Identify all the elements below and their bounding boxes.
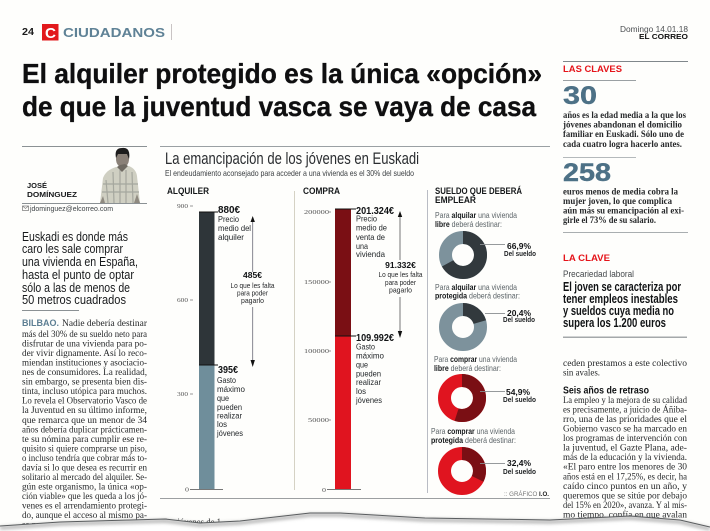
- label: 485 euros: [230, 270, 275, 305]
- kicker: Precariedad laboral: [563, 269, 634, 279]
- heading: sueldo: SUELDO QUE DEBERÁ: [435, 186, 522, 196]
- subheading: Seis años de retraso: [563, 386, 649, 396]
- heading: sueldo: EMPLEAR: [435, 195, 476, 205]
- label: 109.992 euros: [355, 333, 394, 405]
- panel: infographic: [160, 146, 550, 499]
- label: 395 euros: máximo: [217, 384, 245, 394]
- article text: BILBAO.: [22, 318, 59, 328]
- intro text: 50 metros cuadrados: [22, 292, 126, 307]
- donut 2: alquilar protegida: Para alquilar una vivienda: [435, 282, 517, 292]
- text: 258: mujer joven, lo que complica: [563, 196, 672, 206]
- article text: solitario al mercado del alquiler. Se-: [22, 473, 147, 483]
- date: Domingo 14.01.18: [620, 25, 689, 34]
- label: 880 euros: Precio: [218, 214, 239, 224]
- label: 201.324 euros: venta de: [356, 232, 385, 242]
- author photo: [100, 148, 140, 203]
- label: 485 euros: para poder: [237, 288, 268, 298]
- label: 485 euros: 485€: [243, 270, 262, 280]
- article text: tinta, incluso utópica para muchos.: [22, 387, 147, 397]
- label: 91.332 euros: 91.332€: [385, 260, 416, 270]
- donut 3: comprar libre: [434, 354, 536, 416]
- label: 109.992 euros: que: [356, 360, 368, 370]
- label: 201.324 euros: Precio: [356, 214, 377, 224]
- key message: y sueldos cuya media no: [563, 304, 674, 318]
- label: 201.324 euros: vivienda: [356, 249, 385, 259]
- article text: venes es el arrendamiento protegi-: [22, 502, 147, 512]
- axis ticks: 300: [177, 391, 188, 398]
- intro text: [22, 229, 138, 307]
- text: 30: jóvenes abandonan el domicilio: [562, 120, 682, 130]
- graphic credit: :: GRÁFICO I.O.: [504, 491, 549, 498]
- label: 109.992 euros: 109.992€: [356, 333, 394, 344]
- key message: [563, 280, 681, 330]
- label: 395 euros: realizar: [217, 410, 242, 420]
- label: 201.324 euros: una: [356, 241, 368, 251]
- newspaper name: EL CORREO: [639, 32, 688, 41]
- axis ticks: 50000: [308, 417, 329, 424]
- sidebar: la clave: [563, 253, 687, 338]
- article text: o incluso tendría que cobrar más to-: [22, 454, 147, 464]
- label: 395 euros: pueden: [217, 402, 242, 412]
- article continuation: sin avales.: [563, 368, 600, 378]
- article continuation: mo tiempo, confía en que avalan: [563, 509, 687, 520]
- section logo: [42, 24, 58, 42]
- chart subtitle: El endeudamiento aconsejado para acceder a una vivienda es el 30% del sueldo: [165, 168, 414, 178]
- axis ticks: 600: [177, 297, 188, 304]
- article continuation: Gobierno vasco se ha marcado en: [563, 425, 687, 435]
- axis ticks: [177, 203, 223, 494]
- donut 2: alquilar protegida: 20,4%: [507, 308, 531, 318]
- heading: compra: COMPRA: [303, 186, 340, 196]
- key message: supera los 1.200 euros: [563, 316, 666, 330]
- masthead: [22, 24, 689, 42]
- label: 395 euros: que: [217, 393, 229, 403]
- article continuation: los programas de intervención con: [563, 434, 687, 444]
- donut 3: comprar libre: libre deberá destinar:: [434, 363, 501, 373]
- label: 485 euros: Lo que les falta: [230, 281, 275, 290]
- article continuation: La empleo y la mejora de su calidad: [563, 396, 687, 406]
- headline: El alquiler protegido es la única «opción»: [22, 58, 542, 89]
- donut 3: comprar libre: Del sueldo: [503, 397, 536, 404]
- intro text: una vivienda en España,: [22, 254, 138, 269]
- label: 880 euros: [218, 205, 251, 242]
- chart: alquiler: [167, 186, 275, 494]
- label: 91.332 euros: [378, 260, 423, 294]
- text: 258: [563, 186, 684, 225]
- section name: CIUDADANOS: [63, 25, 165, 40]
- donut 4: comprar protegida: Del sueldo: [503, 469, 536, 476]
- text: 258: euros menos de media cobra la: [563, 186, 678, 196]
- bar: gasto maximo: [335, 336, 351, 489]
- text: 30: años es la edad media a la que los: [563, 110, 686, 120]
- article text: der vivir dignamente. Así lo reco-: [22, 349, 147, 359]
- article text: la Juventud en su último informe,: [22, 405, 147, 416]
- author name: JOSÉ: [27, 181, 47, 190]
- donut 1: alquilar libre: Para alquilar una vivienda: [435, 210, 517, 220]
- article text: gún este organismo, la única «op-: [22, 482, 147, 492]
- donut 2: alquilar protegida: [435, 282, 535, 344]
- page number: 24: [22, 26, 34, 38]
- article text: más del 30% de su sueldo neto para: [22, 330, 148, 340]
- headline: [22, 58, 542, 122]
- key message: tener empleos inestables: [563, 292, 678, 306]
- author name: DOMÍNGUEZ: [27, 190, 77, 199]
- article text: Lo revela el Observatorio Vasco de: [22, 397, 147, 407]
- label: 395 euros: Gasto: [217, 375, 236, 385]
- label: 109.992 euros: jóvenes: [355, 395, 382, 405]
- label: 91.332 euros: Lo que les falta: [378, 270, 423, 279]
- article text: disfrutar de una vivienda para po-: [22, 338, 147, 350]
- label: 109.992 euros: Gasto: [356, 342, 375, 352]
- torn page edge: [0, 513, 710, 531]
- axis ticks: 0: [322, 487, 326, 494]
- article continuation: del 15% en 2020», avanza. Y al mis-: [563, 501, 687, 511]
- headline: de que la juventud vasca se vaya de casa: [22, 91, 536, 122]
- text: 30: cada cuatro logra hacerlo antes.: [563, 139, 682, 149]
- big number: 258: 258: [563, 159, 611, 187]
- panel: author: [22, 146, 147, 213]
- donut 4: comprar protegida: protegida deberá destinar:: [431, 435, 516, 445]
- article text: sa por: [22, 520, 45, 530]
- axis ticks: 100000: [304, 348, 329, 355]
- donut 3: comprar libre: Para comprar una vivienda: [434, 354, 517, 364]
- article continuation: rro, una de las prioridades que el: [563, 415, 687, 425]
- article text: te su nómina para cumplir ese re-: [22, 435, 147, 445]
- article continuation: caído cinco puntos en un año, y: [563, 482, 687, 492]
- label: 109.992 euros: realizar: [356, 377, 381, 387]
- intro text: Euskadi es donde más: [22, 229, 128, 244]
- article text: [22, 318, 148, 530]
- donut 4: comprar protegida: Para comprar una vivienda: [431, 426, 515, 436]
- article continuation: queremos que se sitúe por debajo: [563, 491, 687, 501]
- article continuation: «El paro entre los menores de 30: [563, 463, 687, 473]
- bar: precio de venta: [335, 209, 351, 336]
- donut 3: comprar libre: 54,9%: [506, 387, 530, 397]
- label: 395 euros: los: [217, 419, 227, 429]
- article text: ción viable» que les queda a los jó-: [22, 492, 147, 502]
- chart: compra: [303, 186, 423, 494]
- article text: que remarca que un menor de 34: [22, 416, 147, 426]
- article continuation: es precisamente, a juicio de Áñiba-: [563, 404, 687, 416]
- axis ticks: 900: [177, 203, 188, 210]
- heading: sueldo: [435, 186, 522, 205]
- text: 30: [562, 110, 686, 149]
- label: 201.324 euros: [356, 206, 394, 259]
- label: 880 euros: alquiler: [218, 232, 244, 242]
- article continuation: la juventud, el Gazte Plana, ade-: [563, 444, 687, 454]
- label: 201.324 euros: 201.324€: [356, 206, 394, 217]
- donut 1: alquilar libre: [435, 210, 536, 272]
- article continuation: ceden prestamos a este colectivo: [563, 359, 687, 369]
- chart title: La emancipación de los jóvenes en Euskadi: [165, 150, 419, 168]
- article text: sin embargo, se presenta bien dis-: [22, 378, 147, 388]
- article continuation: [563, 359, 688, 520]
- donut 2: alquilar protegida: Del sueldo: [503, 317, 535, 324]
- donut 1: alquilar libre: 66,9%: [507, 241, 531, 251]
- intro text: caro les sale comprar: [22, 241, 124, 256]
- article text: do, aunque el acceso al mismo pa-: [22, 511, 147, 521]
- article text: Nadie debería destinar: [62, 319, 148, 329]
- icon: envelope: [22, 206, 28, 210]
- donut 1: alquilar libre: Del sueldo: [504, 251, 536, 258]
- donut 2: alquilar protegida: protegida deberá destinar:: [435, 290, 520, 300]
- author name: [27, 181, 77, 199]
- label: 485 euros: pagarlo: [241, 296, 264, 305]
- article text: davía si lo que desea es recurrir en: [22, 463, 147, 473]
- arrow: gap compra: [398, 211, 402, 338]
- section logo: C: [45, 25, 56, 42]
- label: 109.992 euros: los: [356, 386, 366, 396]
- donut 4: comprar protegida: 32,4%: [507, 458, 531, 468]
- chart: sueldo donuts: [431, 186, 549, 498]
- axis ticks: 200000: [304, 209, 329, 216]
- arrow: gap alquiler: [250, 216, 255, 367]
- donut 4: comprar protegida: [431, 426, 536, 488]
- article continuation: más de la educación y la vivienda.: [563, 453, 687, 463]
- label: 109.992 euros: pueden: [356, 368, 381, 378]
- sidebar: las claves: [562, 61, 688, 233]
- article text: años debería duplicar prácticamen-: [22, 425, 147, 435]
- bar: precio medio: [199, 212, 214, 365]
- text: 30: familiar en Euskadi. Sólo uno de: [563, 129, 684, 139]
- heading: las claves: LAS CLAVES: [563, 64, 622, 74]
- heading: alquiler: ALQUILER: [167, 186, 209, 196]
- axis ticks: [304, 209, 361, 494]
- label: 91.332 euros: pagarlo: [389, 286, 412, 294]
- label: 91.332 euros: para poder: [385, 278, 416, 287]
- donut 1: alquilar libre: libre deberá destinar:: [435, 219, 502, 229]
- label: 880 euros: 880€: [218, 205, 240, 216]
- axis ticks: 150000: [304, 279, 329, 286]
- intro text: sólo a las de menos de: [22, 280, 130, 295]
- label: 395 euros: [216, 365, 245, 438]
- clipped text fragment: los jóvenes de 1: [165, 518, 221, 528]
- label: 201.324 euros: medio de: [356, 222, 387, 232]
- label: 109.992 euros: máximo: [356, 350, 384, 360]
- heading: la clave: LA CLAVE: [563, 253, 610, 263]
- bar: gasto maximo: [199, 365, 214, 489]
- article continuation: años está en el 17,25%, es decir, ha: [563, 472, 688, 482]
- label: 395 euros: 395€: [218, 365, 238, 376]
- intro text: hasta el punto de optar: [22, 267, 135, 282]
- article text: miendan instituciones y asociacio-: [22, 359, 147, 369]
- article text: quisito si quiere comprarse un piso,: [22, 444, 147, 454]
- axis ticks: 0: [185, 486, 189, 494]
- text: 258: girle el 73% de su salario.: [563, 215, 656, 225]
- label: 395 euros: jóvenes: [216, 428, 243, 438]
- big number: 30: 30: [563, 82, 597, 110]
- label: 880 euros: medio del: [218, 223, 251, 233]
- article text: nes de consumidores. La realidad,: [22, 368, 147, 378]
- author email: jdominguez@elcorreo.com: [29, 204, 113, 213]
- text: 258: aún más su emancipación al exi-: [563, 206, 684, 216]
